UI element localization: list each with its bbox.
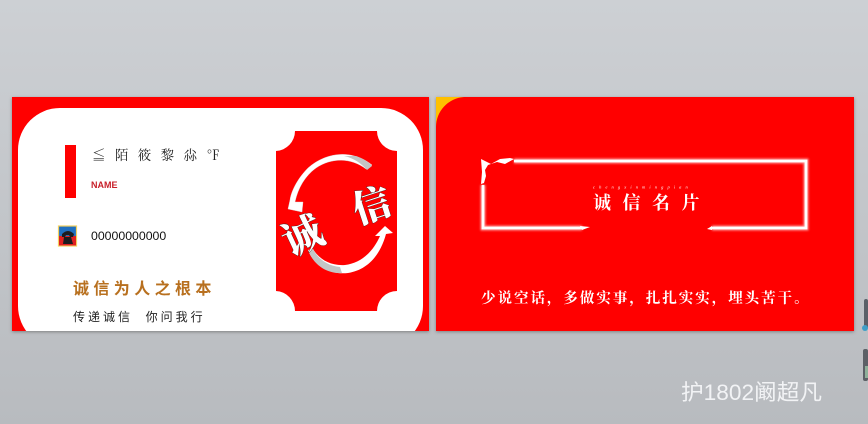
- name label: NAME: [91, 180, 118, 190]
- red name bar: [65, 145, 76, 198]
- card title: 诚信名片: [593, 192, 711, 213]
- white rounded card area: [18, 108, 423, 348]
- slogan: 诚信为人之根本: [73, 279, 216, 298]
- phone number: 00000000000: [91, 229, 166, 243]
- icon: thermometer: [862, 299, 868, 331]
- watermark: 护1802阚超凡: [681, 380, 822, 405]
- panel: card back: [436, 97, 854, 331]
- panel: card front: [12, 97, 429, 348]
- gold corner: [436, 97, 854, 331]
- arrow: bottom arc: [308, 226, 393, 273]
- glowing frame: [481, 158, 806, 230]
- pinyin subtitle: chengxinmingpian: [593, 184, 692, 190]
- motto: 少说空话，多做实事，扎扎实实，埋头苦干。: [481, 289, 811, 307]
- name text: ≦ 陌 筱 黎 尛 ℉: [92, 147, 220, 163]
- tagline: 传递诚信 你问我行: [73, 309, 206, 324]
- arrow: top arc: [288, 154, 372, 212]
- calligraphy: xin: 信: [348, 181, 397, 233]
- red emblem panel with notched corners: [275, 131, 397, 311]
- icon: side gadget: [863, 349, 868, 381]
- icon: telephone: [58, 226, 76, 246]
- calligraphy: cheng: 诚: [275, 208, 330, 265]
